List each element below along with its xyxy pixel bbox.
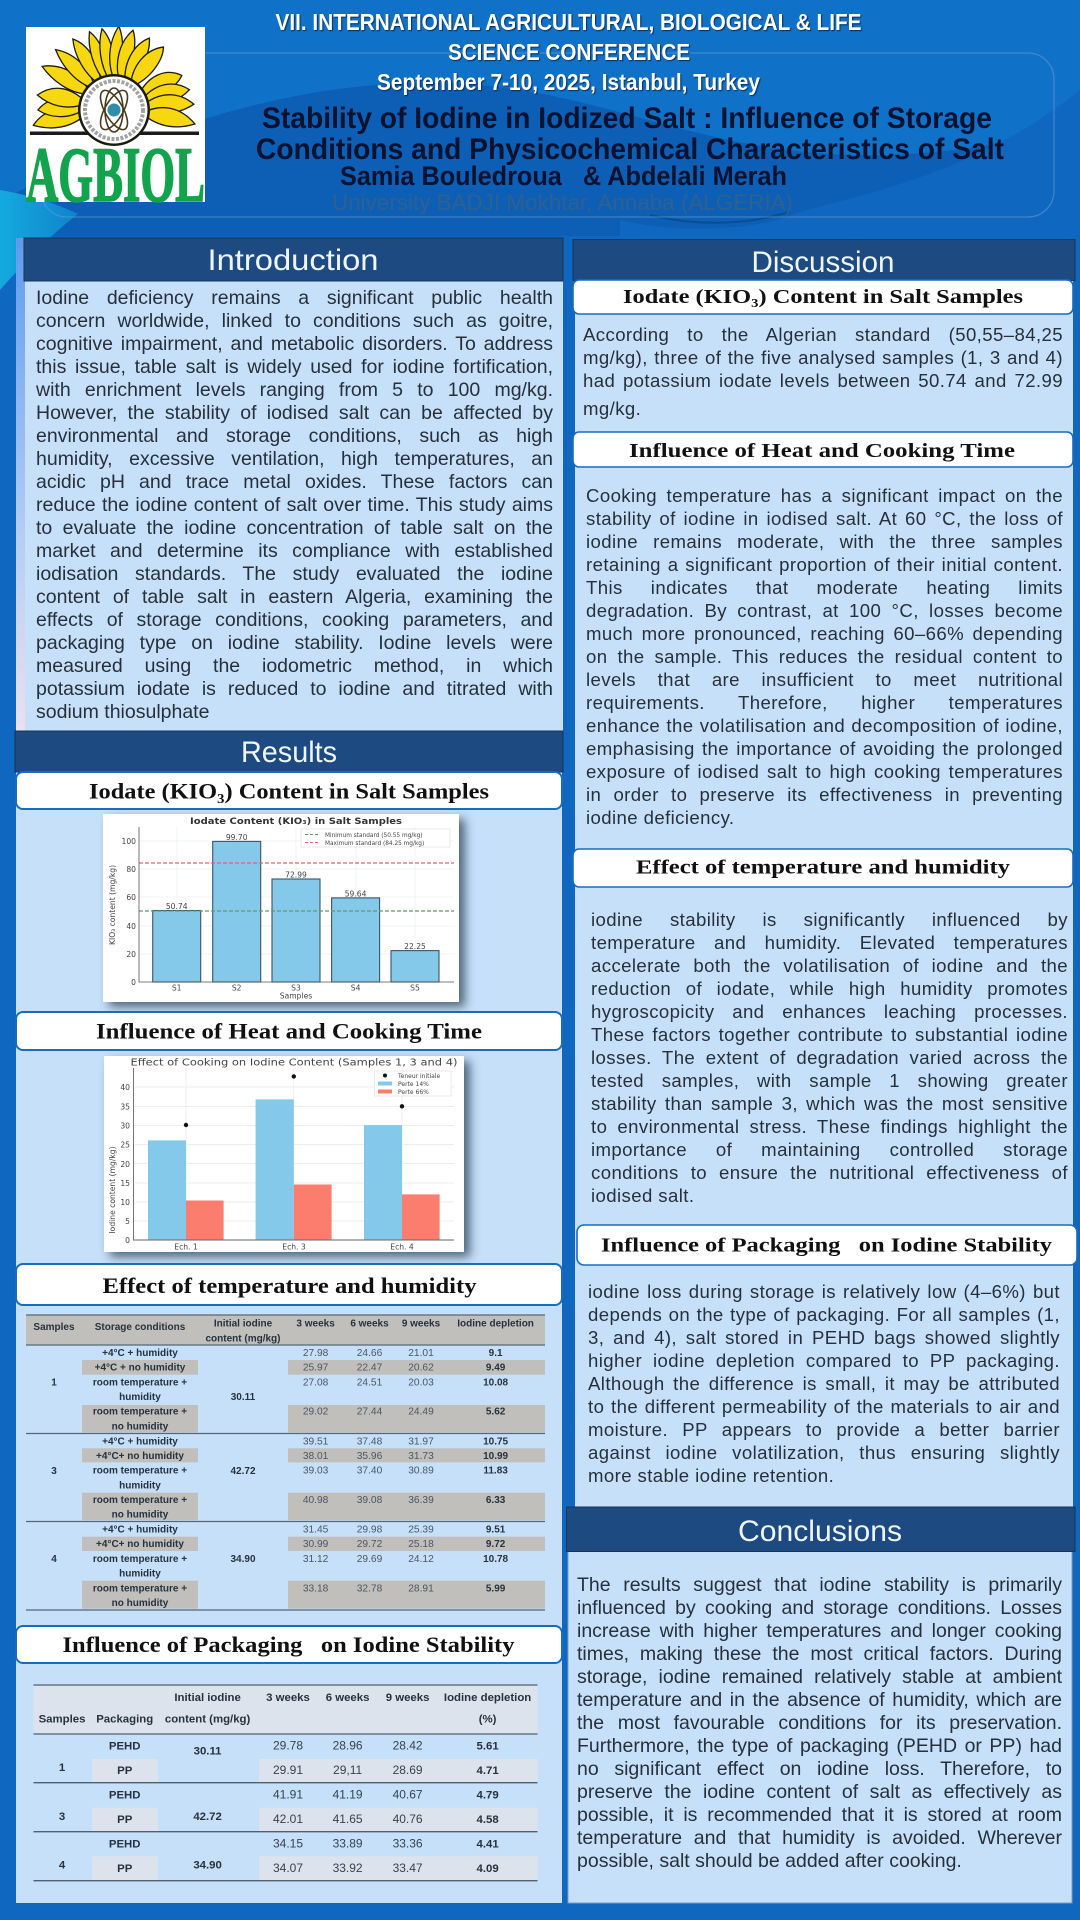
- bar chart: iodate content: [103, 814, 459, 1002]
- sample 3 rows: 11.83: [483, 1466, 508, 1477]
- sample 4 rows: 10.78: [483, 1554, 509, 1565]
- text: heat discussion: This indicates that moderate heating limits: [586, 577, 1063, 598]
- sample 4 rows: PEHD: [109, 1838, 141, 1850]
- sample 4 rows: 34.07: [273, 1861, 303, 1875]
- sample 4 rows: 33.92: [333, 1861, 363, 1875]
- bar chart: iodate content: 80: [126, 865, 136, 874]
- sample 1 rows: room temperature +: [93, 1407, 187, 1418]
- text: conclusions: influenced by cooking and storage conditions. Losses: [577, 1596, 1062, 1618]
- sample 4 rows: 33.18: [303, 1583, 329, 1594]
- sample 3 rows: [59, 1788, 499, 1826]
- subheading: heat and cooking: Influence of Heat and Cooking Time: [96, 1018, 482, 1044]
- text: introduction: acidic pH and trace metal oxides. These factors can: [36, 471, 553, 493]
- sample 1 rows: [51, 1348, 509, 1432]
- sample 1 rows: 9.1: [489, 1348, 503, 1359]
- sample 1 rows: 29.91: [273, 1763, 303, 1777]
- text: heat discussion: degradation. By contrast, at 100 °C, losses become: [586, 600, 1063, 621]
- sample 4 rows: 9.72: [486, 1539, 506, 1550]
- text: heat discussion: requirements. Therefore, higher temperatures: [586, 692, 1063, 713]
- text: packaging discussion: higher iodine depletion compared to PP packaging.: [588, 1350, 1060, 1371]
- bar chart: cooking effect: Ech. 3: [282, 1242, 306, 1252]
- text: iodate discussion: mg/kg.: [583, 398, 641, 419]
- sample 3 rows: 42.01: [273, 1812, 303, 1826]
- sample 1 rows: 25.97: [303, 1363, 329, 1374]
- subheading: packaging: [16, 1626, 562, 1663]
- sample 3 rows: 4.79: [477, 1790, 499, 1802]
- subheading: packaging: Influence of Packaging on Iodine Stability: [601, 1234, 1052, 1256]
- text: heat discussion: exposure of iodised salt to high cooking temperatures: [586, 761, 1063, 782]
- sample 3 rows: PP: [117, 1814, 133, 1826]
- sample 3 rows: 3: [59, 1811, 65, 1823]
- logo wordmark: AGBIOL: [26, 131, 205, 218]
- bar chart: iodate content: Samples: [280, 992, 312, 1000]
- text: humidity discussion: stability than sample 3, which was the most sensitive: [591, 1093, 1068, 1114]
- text: introduction: effects of storage conditions, cooking parameters, and: [36, 609, 553, 631]
- sample 4 rows: [51, 1524, 509, 1609]
- heading: conclusions: Conclusions: [738, 1515, 902, 1548]
- table header: [33, 1319, 534, 1344]
- chart legend: Teneur initiale: [397, 1073, 441, 1080]
- table header: Packaging: [96, 1714, 153, 1726]
- sample 3 rows: 10.75: [483, 1436, 509, 1447]
- bar chart: iodate content: S5: [410, 984, 420, 992]
- text: conclusions: Furthermore, the type of packaging (PEHD or PP) had: [577, 1734, 1062, 1756]
- sample 4 rows: [59, 1836, 499, 1875]
- sample 3 rows: 42.72: [230, 1466, 256, 1477]
- sample 1 rows: 10.08: [483, 1377, 509, 1388]
- sample 3 rows: 10.99: [483, 1451, 509, 1462]
- sample 4 rows: 33.47: [393, 1861, 423, 1875]
- sample 3 rows: PEHD: [109, 1790, 141, 1802]
- table header: 6 weeks: [350, 1319, 389, 1330]
- text: conclusions: no significant effect on iodine loss. Therefore, to: [577, 1758, 1062, 1780]
- sample 3 rows: 39.51: [303, 1436, 329, 1447]
- text: heat discussion: enhance the volatilisation and decomposition of iodine,: [586, 715, 1063, 736]
- subheading: iodate content: Iodate (KIO₃) Content in Salt Samples: [623, 286, 1023, 308]
- sample 3 rows: 3: [51, 1466, 57, 1477]
- text: introduction: humidity, excessive ventilation, high temperatures, an: [36, 448, 553, 470]
- text: heat discussion: emphasising the importance of avoiding the prolonged: [586, 738, 1063, 759]
- authors: Samia Bouledroua & Abdelali Merah: [340, 161, 787, 191]
- text: heat discussion: much more pronounced, reaching 60–66% depending: [586, 623, 1063, 644]
- sample 3 rows: 41.19: [333, 1788, 363, 1802]
- text: iodate discussion: had potassium iodate levels between 50.74 and 72.99: [583, 370, 1063, 391]
- sample 1 rows: 24.49: [408, 1407, 434, 1418]
- sample 4 rows: 24.12: [408, 1554, 434, 1565]
- text: humidity discussion: hygroscopicity and enhances leaching processes.: [591, 1001, 1068, 1022]
- sample 3 rows: +4°C+ no humidity: [96, 1451, 184, 1462]
- text: heat discussion: levels that are insufficient to meet nutritional: [586, 669, 1063, 690]
- sample 3 rows: 37.48: [357, 1436, 383, 1447]
- sample 4 rows: 4.09: [477, 1863, 499, 1875]
- text: introduction: market and determine its compliance with established: [36, 540, 553, 562]
- table header: Samples: [39, 1714, 85, 1726]
- sample 1 rows: 28.42: [393, 1738, 423, 1752]
- chart legend: Maximum standard (84.25 mg/kg): [325, 841, 424, 847]
- sample 1 rows: no humidity: [112, 1421, 169, 1432]
- table header: 3 weeks: [296, 1319, 335, 1330]
- bar chart: cooking effect: 15: [120, 1179, 130, 1188]
- sample 3 rows: 35.96: [357, 1451, 383, 1462]
- text: humidity discussion: iodised salt.: [591, 1185, 694, 1206]
- sample 1 rows: 22.47: [357, 1363, 383, 1374]
- title frame: [41, 53, 1054, 217]
- heading: introduction: Introduction: [208, 244, 378, 277]
- bar chart: iodate content: 99.70: [226, 833, 248, 842]
- sample 1 rows: 5.61: [477, 1740, 499, 1752]
- sample 1 rows: 20.03: [408, 1377, 434, 1388]
- text: humidity discussion: These factors together contribute to substantial iodine: [591, 1024, 1068, 1045]
- sample 3 rows: no humidity: [112, 1510, 169, 1521]
- sample 4 rows: room temperature +: [93, 1554, 187, 1565]
- text: packaging discussion: 3, and 4), salt stored in PEHD bags showed slightly: [588, 1327, 1060, 1348]
- text: humidity discussion: iodine stability is significantly influenced by: [591, 909, 1068, 930]
- bar chart: cooking effect: Effect of Cooking on Iodine Content (Samples 1, 3 and 4): [130, 1058, 458, 1068]
- text: conclusions: [577, 1574, 1062, 1872]
- sample 4 rows: PP: [117, 1863, 133, 1875]
- sample 1 rows: 27.44: [357, 1407, 383, 1418]
- table header: Iodine depletion: [457, 1319, 534, 1330]
- icon: sunflower petals: [32, 26, 196, 131]
- text: heat discussion: stability of iodine in iodised salt. At 60 °C, the loss of: [586, 508, 1063, 529]
- text: introduction: Iodine deficiency remains a significant public health: [36, 287, 553, 309]
- sample 1 rows: 27.98: [303, 1348, 329, 1359]
- sample 1 rows: 29.02: [303, 1407, 329, 1418]
- sample 1 rows: 5.62: [486, 1407, 506, 1418]
- text: conclusions: storage, iodine remained relatively stable at ambient: [577, 1666, 1062, 1688]
- heading: results: Results: [241, 736, 337, 769]
- text: heat discussion: iodine deficiency.: [586, 807, 734, 828]
- sample 4 rows: 4: [59, 1860, 66, 1872]
- sample 1 rows: 29.78: [273, 1738, 303, 1752]
- table header: content (mg/kg): [206, 1333, 280, 1344]
- conference title: VII. INTERNATIONAL AGRICULTURAL, BIOLOGICAL & LIFE: [276, 9, 862, 35]
- sample 4 rows: 25.39: [408, 1524, 434, 1535]
- subheading: temperature and humidity: Effect of temperature and humidity: [102, 1273, 476, 1298]
- table header: Initial iodine: [214, 1319, 273, 1330]
- text: packaging discussion: moisture. PP appears to provide a better barrier: [588, 1419, 1060, 1440]
- subheading: heat and cooking: [16, 1012, 562, 1050]
- text: introduction: reduce the iodine content of salt over time. This study aims: [36, 494, 553, 516]
- bar chart: cooking effect: Ech. 1: [174, 1242, 198, 1252]
- subheading: temperature and humidity: [573, 849, 1073, 887]
- text: introduction: concern worldwide, linked to conditions such as goitre,: [36, 310, 553, 332]
- sample 4 rows: 34.15: [273, 1836, 303, 1850]
- sample 1 rows: 4.71: [477, 1765, 499, 1777]
- subheading: packaging: Influence of Packaging on Iodine Stability: [62, 1632, 514, 1657]
- sample 4 rows: 29.98: [357, 1524, 383, 1535]
- conference title: SCIENCE CONFERENCE: [448, 39, 690, 65]
- sample 1 rows: 24.66: [357, 1348, 383, 1359]
- sample 1 rows: +4°C + no humidity: [95, 1363, 186, 1374]
- text: conclusions: preserve the iodine content of salt as effectively as: [577, 1780, 1062, 1802]
- text: heat discussion: iodine remains moderate, with the three samples: [586, 531, 1063, 552]
- sample 3 rows: [51, 1436, 509, 1521]
- sample 4 rows: +4°C + humidity: [102, 1524, 178, 1535]
- sample 4 rows: 32.78: [357, 1583, 383, 1594]
- bar chart: cooking effect: Iodine content (mg/kg): [108, 1146, 117, 1234]
- text: humidity discussion: reduction of iodate, while high humidity promotes: [591, 978, 1068, 999]
- subheading: heat and cooking: [573, 432, 1073, 467]
- bar chart: cooking effect: 25: [120, 1140, 130, 1150]
- bar chart: iodate content: S3: [291, 984, 301, 992]
- sample 4 rows: no humidity: [112, 1598, 169, 1609]
- chart legend: [301, 829, 450, 847]
- bar chart: iodate content: 0: [131, 978, 136, 987]
- panel: introduction: [16, 238, 563, 731]
- sample 1 rows: 30.11: [194, 1746, 222, 1758]
- text: iodate discussion: mg/kg), three of the five analysed samples (1, 3 and 4): [583, 347, 1063, 368]
- text: conclusions: temperature and in the absence of humidity, which are: [577, 1688, 1062, 1710]
- chart legend: [374, 1071, 451, 1096]
- poster title: [256, 102, 1004, 166]
- text: heat discussion: Cooking temperature has a significant impact on the: [586, 485, 1063, 506]
- sample 1 rows: humidity: [119, 1392, 161, 1403]
- table: temperature and humidity: [26, 1315, 545, 1610]
- text: introduction: content of table salt in eastern Algeria, examining the: [36, 586, 553, 608]
- bar chart: iodate content: 20: [126, 950, 136, 959]
- sample 4 rows: 31.12: [303, 1554, 329, 1565]
- text: packaging discussion: Although the difference is small, it may be attributed: [588, 1373, 1060, 1394]
- sample 3 rows: room temperature +: [93, 1466, 187, 1477]
- bar chart: iodate content: 60: [126, 893, 136, 902]
- panel: results: [15, 731, 563, 1903]
- bar chart: cooking effect: 20: [120, 1160, 130, 1169]
- subheading: packaging: [577, 1225, 1077, 1265]
- text: humidity discussion: accelerate both the volatilisation of iodine and the: [591, 955, 1068, 976]
- bar chart: cooking effect: 35: [120, 1102, 130, 1112]
- sample 3 rows: 39.03: [303, 1466, 329, 1477]
- sample 4 rows: 31.45: [303, 1524, 329, 1535]
- sample 4 rows: 9.51: [486, 1524, 506, 1535]
- sample 4 rows: 29.72: [357, 1539, 383, 1550]
- poster title: Conditions and Physicochemical Characteristics of Salt: [256, 133, 1004, 166]
- heading: discussion: Discussion: [752, 246, 894, 279]
- sample 3 rows: 40.76: [393, 1812, 423, 1826]
- table header: Storage conditions: [95, 1322, 186, 1333]
- heading: results: [15, 731, 563, 772]
- text: introduction: packaging type on iodine stability. Iodine levels were: [36, 632, 553, 654]
- text: humidity discussion: [591, 909, 1068, 1206]
- sample 4 rows: 4: [51, 1554, 57, 1565]
- text: conclusions: increase with higher temperatures and longer cooking: [577, 1620, 1062, 1642]
- sample 1 rows: PP: [117, 1765, 133, 1777]
- text: introduction: this issue, table salt is widely used for iodine fortification,: [36, 356, 553, 378]
- sample 1 rows: 1: [51, 1378, 57, 1389]
- text: packaging discussion: more stable iodine retention.: [588, 1465, 834, 1486]
- sample 4 rows: 33.89: [333, 1836, 363, 1850]
- sample 3 rows: 37.40: [357, 1466, 383, 1477]
- text: iodate discussion: According to the Algerian standard (50,55–84,25: [583, 324, 1063, 345]
- text: conclusions: the most favourable conditions for its preservation.: [577, 1712, 1062, 1734]
- sample 3 rows: 40.98: [303, 1495, 329, 1506]
- text: conclusions: possible, it is recommended that it is stored at room: [577, 1804, 1062, 1826]
- text: humidity discussion: losses. The extent of degradation varied across the: [591, 1047, 1068, 1068]
- sample 4 rows: 4.41: [477, 1838, 499, 1850]
- text: humidity discussion: tested samples, with sample 1 showing greater: [591, 1070, 1068, 1091]
- bar chart: iodate content: 72.99: [285, 870, 307, 880]
- sample 4 rows: 28.91: [408, 1583, 434, 1594]
- text: heat discussion: [586, 485, 1063, 828]
- subheading: iodate content: Iodate (KIO₃) Content in Salt Samples: [89, 778, 489, 804]
- subheading: iodate content: [573, 280, 1073, 314]
- subheading: heat and cooking: Influence of Heat and Cooking Time: [629, 440, 1015, 462]
- subheading: temperature and humidity: Effect of temperature and humidity: [636, 856, 1010, 878]
- bar chart: cooking effect: [104, 1056, 464, 1252]
- table header: content (mg/kg): [165, 1714, 251, 1726]
- chart legend: Perte 14%: [398, 1081, 429, 1088]
- text: introduction: potassium iodate is reduced to iodine and titrated with: [36, 678, 553, 700]
- sample 3 rows: 31.73: [408, 1451, 434, 1462]
- sample 1 rows: 29,11: [333, 1763, 362, 1777]
- chart legend: Minimum standard (50.55 mg/kg): [325, 833, 423, 839]
- sample 3 rows: +4°C + humidity: [102, 1436, 178, 1447]
- text: heat discussion: on the sample. This reduces the residual content to: [586, 646, 1063, 667]
- icon: atom ring: [78, 74, 150, 146]
- sample 1 rows: 24.51: [357, 1377, 383, 1388]
- sample 4 rows: room temperature +: [93, 1583, 187, 1594]
- sample 4 rows: +4°C+ no humidity: [96, 1539, 184, 1550]
- bar chart: iodate content: S1: [172, 984, 182, 992]
- text: introduction: measured using the iodometric method, in which: [36, 655, 553, 677]
- text: humidity discussion: temperature and humidity. Elevated temperatures: [591, 932, 1068, 953]
- text: humidity discussion: to environmental stress. These findings highlight the: [591, 1116, 1068, 1137]
- table header: Iodine depletion: [444, 1692, 531, 1704]
- logo: AGBIOL: [26, 26, 205, 218]
- panel: discussion: [573, 240, 1077, 1508]
- text: conclusions: The results suggest that iodine stability is primarily: [577, 1574, 1062, 1596]
- sample 3 rows: 30.89: [408, 1466, 434, 1477]
- sample 3 rows: 31.97: [408, 1436, 434, 1447]
- sample 4 rows: humidity: [119, 1569, 161, 1580]
- sample 3 rows: 4.58: [477, 1814, 499, 1826]
- sample 3 rows: 41.65: [333, 1812, 363, 1826]
- sample 3 rows: 42.72: [193, 1811, 222, 1823]
- sample 1 rows: PEHD: [109, 1740, 141, 1752]
- sample 3 rows: 36.39: [408, 1495, 434, 1506]
- text: heat discussion: in order to preserve its effectiveness in preventing: [586, 784, 1063, 805]
- sample 3 rows: room temperature +: [93, 1495, 187, 1506]
- sample 4 rows: 34.90: [193, 1860, 222, 1872]
- text: introduction: to evaluate the iodine concentration of table salt on the: [36, 517, 553, 539]
- subheading: temperature and humidity: [16, 1264, 562, 1305]
- sample 1 rows: 28.69: [393, 1763, 423, 1777]
- table header: Initial iodine: [174, 1692, 241, 1704]
- bar chart: iodate content: 22.25: [404, 942, 426, 951]
- sample 3 rows: 6.33: [486, 1495, 506, 1506]
- poster title: Stability of Iodine in Iodized Salt : Influence of Storage: [262, 102, 992, 135]
- table: packaging: [34, 1685, 538, 1881]
- bar chart: iodate content: Iodate Content (KIO₃) in Salt Samples: [190, 817, 402, 827]
- sample 1 rows: 21.01: [408, 1348, 434, 1359]
- text: packaging discussion: iodine loss during storage is relatively low (4–6%) but: [588, 1281, 1060, 1302]
- table header: [39, 1692, 531, 1726]
- sample 4 rows: 30.99: [303, 1539, 329, 1550]
- sample 1 rows: room temperature +: [93, 1377, 187, 1388]
- sample 1 rows: 9.49: [486, 1363, 506, 1374]
- text: packaging discussion: to the different permeability of the materials to air and: [588, 1396, 1060, 1417]
- text: heat discussion: retaining a significant proportion of their initial content.: [586, 554, 1063, 575]
- sample 3 rows: 40.67: [393, 1788, 423, 1802]
- bar chart: cooking effect: 40: [120, 1083, 130, 1092]
- table header: 3 weeks: [266, 1692, 310, 1704]
- text: packaging discussion: against iodine volatilization, thus ensuring slightly: [588, 1442, 1060, 1463]
- text: introduction: with enrichment levels ranging from 5 to 100 mg/kg.: [36, 379, 553, 401]
- sample 4 rows: 5.99: [486, 1583, 506, 1594]
- text: conclusions: temperature and that humidity is avoided. Wherever: [577, 1826, 1062, 1848]
- bar chart: cooking effect: 5: [125, 1217, 130, 1226]
- text: packaging discussion: depends on the type of packaging. For all samples (1,: [588, 1304, 1060, 1325]
- text: humidity discussion: conditions to ensure the nutritional effectiveness of: [591, 1162, 1068, 1183]
- sample 4 rows: 25.18: [408, 1539, 434, 1550]
- panel: conclusions: [566, 1507, 1075, 1903]
- sample 4 rows: 34.90: [230, 1554, 256, 1565]
- text: conclusions: possible, salt should be added after cooking.: [577, 1850, 962, 1872]
- bar chart: cooking effect: 0: [125, 1236, 130, 1245]
- sample 1 rows: [59, 1738, 499, 1777]
- sample 4 rows: 29.69: [357, 1554, 383, 1565]
- bar chart: iodate content: 100: [122, 837, 136, 846]
- table header: 9 weeks: [386, 1692, 429, 1704]
- bar chart: cooking effect: Ech. 4: [390, 1242, 414, 1252]
- chart legend: Perte 66%: [398, 1089, 429, 1096]
- sample 1 rows: 20.62: [408, 1363, 434, 1374]
- text: introduction: [36, 287, 553, 723]
- table header: 9 weeks: [402, 1319, 441, 1330]
- heading: discussion: [573, 240, 1075, 280]
- sample 1 rows: 1: [59, 1762, 66, 1774]
- text: packaging discussion: [588, 1281, 1060, 1486]
- text: introduction: However, the stability of iodised salt can be affected by: [36, 402, 553, 424]
- table header: Samples: [33, 1322, 75, 1333]
- sample 1 rows: 30.11: [231, 1392, 256, 1403]
- sample 4 rows: 33.36: [393, 1836, 423, 1850]
- sample 3 rows: humidity: [119, 1480, 161, 1491]
- bar chart: cooking effect: 10: [120, 1198, 130, 1207]
- bar chart: cooking effect: 30: [120, 1122, 130, 1130]
- affiliation: University BADJI Mokhtar, Annaba (ALGERIA): [332, 190, 793, 215]
- text: iodate discussion: [583, 324, 1063, 419]
- text: introduction: environmental and storage conditions, such as high: [36, 425, 553, 447]
- text: introduction: cognitive impairment, and metabolic disorders. To address: [36, 333, 553, 355]
- conference title: September 7-10, 2025, Istanbul, Turkey: [377, 69, 760, 95]
- bar chart: iodate content: 59.64: [345, 890, 367, 898]
- text: conclusions: times, making these the most critical factors. During: [577, 1642, 1062, 1664]
- table header: (%): [479, 1714, 497, 1726]
- sample 1 rows: 28.96: [333, 1738, 363, 1752]
- sample 1 rows: +4°C + humidity: [102, 1348, 178, 1359]
- table header: 6 weeks: [326, 1692, 369, 1704]
- bar chart: iodate content: 50.74: [166, 902, 188, 911]
- heading: introduction: [24, 238, 563, 281]
- sample 3 rows: 38.01: [303, 1451, 329, 1462]
- conference title: [276, 9, 862, 95]
- sample 3 rows: 39.08: [357, 1495, 383, 1506]
- subheading: iodate content: [16, 772, 562, 809]
- bar chart: iodate content: S2: [232, 984, 242, 992]
- sample 3 rows: 41.91: [273, 1788, 303, 1802]
- heading: conclusions: [566, 1507, 1075, 1552]
- bar chart: iodate content: S4: [351, 984, 361, 992]
- bar chart: iodate content: 40: [126, 922, 136, 931]
- bar chart: iodate content: KIO₃ content (mg/kg): [108, 865, 117, 945]
- sample 1 rows: 27.08: [303, 1377, 329, 1388]
- text: introduction: sodium thiosulphate: [36, 701, 209, 723]
- text: humidity discussion: importance of maintaining controlled storage: [591, 1139, 1068, 1160]
- text: introduction: iodisation standards. The study evaluated the iodine: [36, 563, 553, 585]
